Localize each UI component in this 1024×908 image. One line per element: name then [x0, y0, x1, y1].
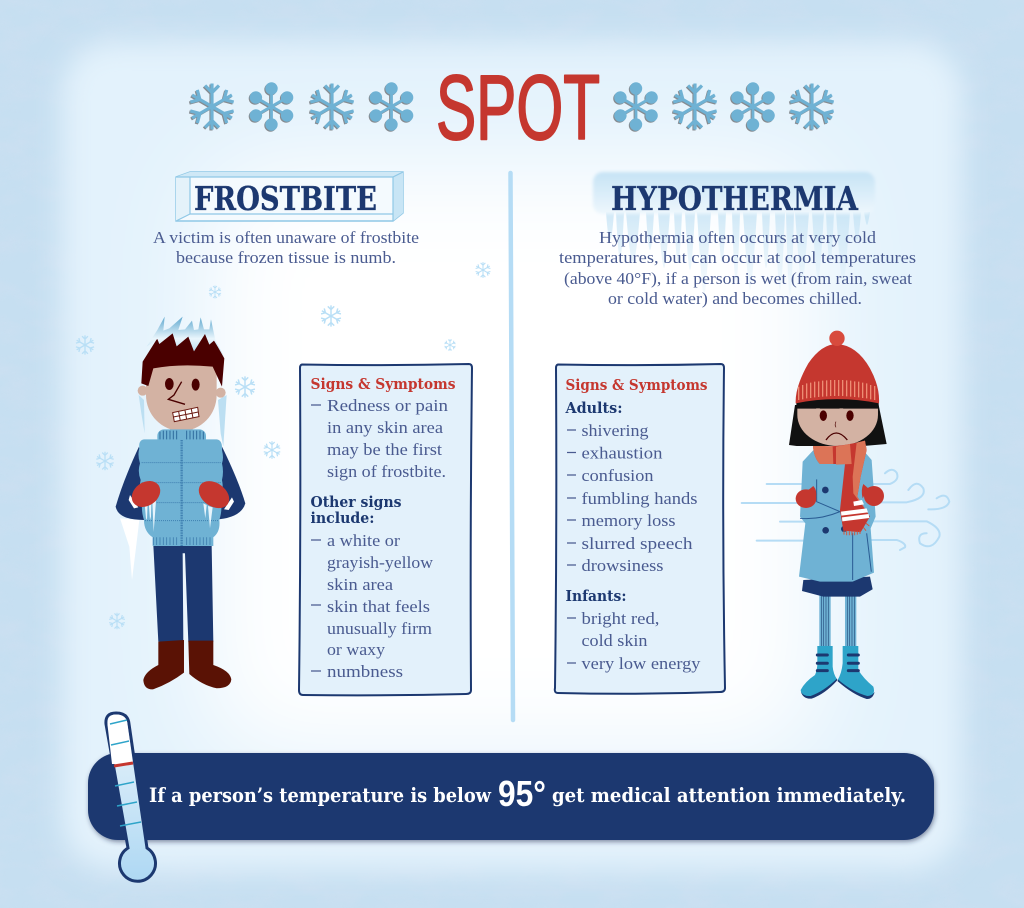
panel: hypothermia signs and symptoms: slurred speech [582, 534, 693, 553]
callout banner: If a person’s temperature is below [149, 783, 492, 807]
hypothermia heading with icicles [593, 172, 875, 296]
panel: frostbite signs and symptoms: unusually firm [327, 619, 432, 638]
center divider [510, 173, 513, 720]
panel: hypothermia signs and symptoms: exhaustion [582, 444, 663, 462]
frostbite heading in ice block: FROSTBITE [194, 179, 377, 218]
hypothermia intro text [559, 228, 916, 308]
icon: thermometer [106, 713, 156, 881]
panel: hypothermia signs and symptoms: bright red, [582, 609, 660, 628]
panel: frostbite signs and symptoms [299, 364, 472, 695]
background snowflakes [75, 262, 491, 629]
hypothermia heading with icicles: HYPOTHERMIA [611, 179, 858, 218]
panel: hypothermia signs and symptoms: shivering [582, 421, 649, 440]
panel: hypothermia signs and symptoms: drowsiness [582, 556, 664, 575]
title: SPOT [436, 57, 600, 159]
panel: hypothermia signs and symptoms: Signs & Symptoms [566, 376, 708, 394]
hypothermia intro text: or cold water) and becomes chilled. [608, 289, 862, 308]
snowflake row: right [611, 82, 835, 132]
illustration: frozen boy [116, 317, 245, 689]
callout banner: 95° [498, 773, 546, 814]
snowflake row: left [188, 82, 416, 132]
panel: frostbite signs and symptoms: or waxy [327, 640, 386, 659]
panel: frostbite signs and symptoms: sign of frostbite. [327, 462, 446, 481]
panel: frostbite signs and symptoms: skin that feels [327, 597, 430, 616]
hypothermia intro text: (above 40°F), if a person is wet (from rain, sweat [564, 269, 912, 288]
illustration: shivering girl [742, 331, 949, 699]
callout banner: get medical attention immediately. [552, 783, 906, 807]
panel: hypothermia signs and symptoms: Infants: [566, 587, 626, 605]
panel: frostbite signs and symptoms: Other signs [310, 493, 402, 511]
panel: frostbite signs and symptoms: grayish-yellow [327, 553, 434, 572]
frostbite intro text: because frozen tissue is numb. [176, 248, 396, 267]
panel: hypothermia signs and symptoms: fumbling hands [582, 489, 698, 508]
panel: hypothermia signs and symptoms: memory loss [582, 511, 676, 530]
panel: hypothermia signs and symptoms: very low energy [582, 654, 701, 673]
hypothermia intro text: temperatures, but can occur at cool temperatures [559, 248, 916, 267]
panel: frostbite signs and symptoms: skin area [327, 575, 393, 594]
panel: hypothermia signs and symptoms: Adults: [565, 399, 622, 417]
panel: hypothermia signs and symptoms [555, 364, 725, 694]
hypothermia intro text: Hypothermia often occurs at very cold [599, 228, 877, 247]
panel: frostbite signs and symptoms: in any skin area [327, 418, 443, 437]
panel: hypothermia signs and symptoms: confusion [582, 466, 654, 485]
panel: frostbite signs and symptoms: include: [310, 509, 374, 527]
panel: frostbite signs and symptoms: may be the first [327, 440, 442, 459]
panel: frostbite signs and symptoms: Signs & Symptoms [310, 375, 456, 393]
frostbite intro text [153, 228, 419, 267]
frostbite intro text: A victim is often unaware of frostbite [153, 228, 419, 247]
panel: frostbite signs and symptoms: a white or [327, 531, 400, 550]
panel: hypothermia signs and symptoms: cold skin [582, 631, 648, 650]
panel: frostbite signs and symptoms: numbness [327, 662, 403, 681]
panel: frostbite signs and symptoms: Redness or pain [327, 396, 449, 415]
callout banner [88, 753, 934, 840]
